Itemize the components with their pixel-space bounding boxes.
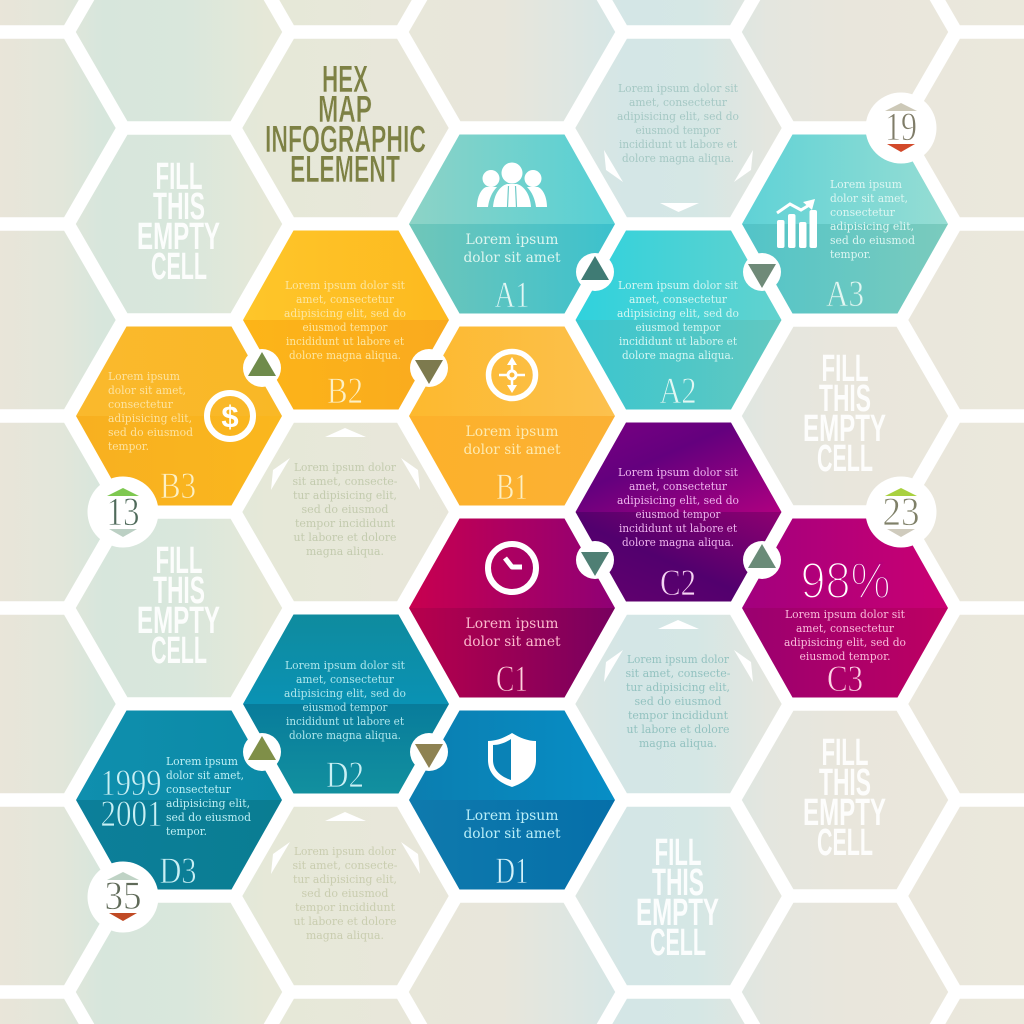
connector arrow: B3 to B2: [243, 349, 281, 387]
pale text cell: bottom left with arrows: [271, 812, 420, 942]
pale text cell: left center with arrows: tur adipisicing elit,: [293, 489, 397, 502]
badge: 13: [88, 476, 158, 548]
fill cell text: right lower: FILL: [822, 732, 868, 774]
fill cell text: right lower: THIS: [819, 762, 871, 804]
badge: 35: [88, 862, 158, 932]
panel: C3: eiusmod tempor.: [800, 650, 890, 663]
panel: D3: adipisicing elit,: [166, 797, 250, 810]
panel: B2: amet, consectetur: [296, 293, 395, 306]
pale text cell: left center with arrows: sed do eiusmod: [302, 503, 388, 516]
pale text cell: center right with arrows: tempor incididunt: [628, 709, 729, 722]
panel: B3: [76, 326, 282, 507]
icon: dollar coin: [207, 393, 253, 439]
panel: D2: Lorem ipsum dolor sit: [285, 659, 406, 672]
panel: D3: consectetur: [166, 783, 232, 796]
badge: 13: 13: [106, 489, 140, 534]
fill cell text: left lower: CELL: [151, 630, 207, 672]
panel: B1: Lorem ipsum: [466, 424, 559, 440]
panel: B3: dolor sit amet,: [108, 384, 186, 397]
panel: C2: [576, 422, 782, 604]
panel: D1: dolor sit amet: [464, 826, 561, 842]
icon: compass: [488, 352, 536, 398]
fill cell text: right lower: [803, 732, 886, 864]
badge: 19: 19: [885, 104, 917, 149]
pale text cell: bottom left with arrows: ut labore et dolore: [294, 915, 396, 928]
connector arrow: A2 to A3: [743, 253, 781, 291]
fill cell text: left lower: THIS: [153, 570, 205, 612]
panel: A2: A2: [660, 371, 696, 412]
title: INFOGRAPHIC: [265, 119, 426, 161]
panel: C3: C3: [827, 659, 863, 700]
panel: B2: incididunt ut labore et: [286, 335, 405, 348]
title: [265, 59, 426, 191]
fill cell text: bottom center: [636, 832, 719, 964]
pale text cell: center right with arrows: tur adipisicing elit,: [626, 681, 730, 694]
icon: people: [477, 162, 547, 207]
panel: B2: adipisicing elit, sed do: [284, 307, 406, 320]
panel: D1: Lorem ipsum: [466, 808, 559, 824]
panel: B1: dolor sit amet: [464, 442, 561, 458]
panel: B3: Lorem ipsum: [108, 370, 181, 383]
pale text cell: top right with arrows: dolore magna aliqua.: [622, 152, 734, 165]
panel: A1: dolor sit amet: [464, 250, 561, 266]
fill cell text: left lower: [137, 540, 220, 672]
panel: D2: adipisicing elit, sed do: [284, 687, 406, 700]
fill cell text: bottom center: CELL: [650, 922, 706, 964]
panel: B1: B1: [496, 467, 528, 508]
panel: D2: incididunt ut labore et: [286, 715, 405, 728]
panel: A1: Lorem ipsum: [466, 232, 559, 248]
panel: D3: [76, 710, 282, 892]
connector arrow: A1 to A2: [576, 253, 614, 291]
fill cell text: right upper: [803, 348, 886, 480]
title: HEX: [322, 59, 368, 101]
panel: C1: dolor sit amet: [464, 634, 561, 650]
connector arrow: D3 to D2: [243, 733, 281, 771]
pale text cell: center right with arrows: magna aliqua.: [639, 737, 717, 750]
panel: D1: D1: [496, 851, 528, 892]
fill cell text: left lower: EMPTY: [137, 600, 220, 642]
panel: C2: amet, consectetur: [629, 480, 728, 493]
panel: B3: sed do eiusmod: [108, 426, 193, 439]
panel: D3: tempor.: [166, 825, 207, 838]
pale text cell: top right with arrows: [604, 82, 753, 212]
panel: C2: C2: [660, 563, 696, 604]
panel: A2: Lorem ipsum dolor sit: [618, 279, 739, 292]
fill cell text: right lower: CELL: [817, 822, 873, 864]
fill cell text: left upper: [137, 156, 220, 288]
pale text cell: center right with arrows: [604, 620, 753, 750]
panel: A2: eiusmod tempor: [636, 321, 721, 334]
panel: C1: [409, 518, 615, 700]
fill cell text: left upper: EMPTY: [137, 216, 220, 258]
pale text cell: bottom left with arrows: sit amet, consecte-: [292, 859, 398, 872]
panel: A2: [576, 230, 782, 412]
panel: A2: dolore magna aliqua.: [622, 349, 734, 362]
panel: D3: sed do eiusmod: [166, 811, 251, 824]
pale text cell: bottom left with arrows: magna aliqua.: [306, 929, 384, 942]
pale text cell: bottom left with arrows: tempor incididunt: [295, 901, 396, 914]
panel: A3: [742, 134, 948, 315]
panel: B3: consectetur: [108, 398, 174, 411]
panel: D3: D3: [160, 851, 196, 892]
pale text cell: top right with arrows: adipisicing elit, sed do: [617, 110, 739, 123]
panel: D2: amet, consectetur: [296, 673, 395, 686]
fill cell text: left upper: FILL: [156, 156, 202, 198]
panel: C2: eiusmod tempor: [636, 508, 721, 521]
pale text cell: top right with arrows: eiusmod tempor: [636, 124, 721, 137]
icon: shield: [488, 733, 536, 787]
pale text cell: left center with arrows: [271, 428, 420, 558]
connector arrow: B2 to B1: [410, 349, 448, 387]
fill cell text: bottom center: EMPTY: [636, 892, 719, 934]
panel: A3: consectetur: [830, 206, 896, 219]
panel: C3: amet, consectetur: [796, 622, 895, 635]
title: ELEMENT: [290, 149, 400, 191]
panel: A3: sed do eiusmod: [830, 234, 915, 247]
pale text cell: bottom left with arrows: Lorem ipsum dolor: [294, 845, 397, 858]
panel: C2: adipisicing elit, sed do: [617, 494, 739, 507]
panel: D3: dolor sit amet,: [166, 769, 244, 782]
pale text cell: left center with arrows: tempor incididunt: [295, 517, 396, 530]
pale text cell: left center with arrows: sit amet, consecte-: [292, 475, 398, 488]
panel: C1: C1: [496, 659, 528, 700]
fill cell text: right upper: THIS: [819, 378, 871, 420]
connector arrow: C2 to C3: [743, 541, 781, 579]
panel: A2: amet, consectetur: [629, 293, 728, 306]
connector arrow: C1 to C2: [576, 541, 614, 579]
fill cell text: left lower: FILL: [156, 540, 202, 582]
title: MAP: [318, 89, 372, 131]
panel: C3: Lorem ipsum dolor sit: [785, 608, 906, 621]
panel: A3: A3: [826, 274, 864, 315]
badge: 19: [866, 92, 936, 164]
panel: C3: adipisicing elit, sed do: [784, 636, 906, 649]
pale text cell: left center with arrows: ut labore et dolore: [294, 531, 396, 544]
panel: C3: [742, 518, 948, 700]
panel: A3: Lorem ipsum: [830, 178, 903, 191]
panel: C2: Lorem ipsum dolor sit: [618, 466, 739, 479]
fill cell text: left upper: CELL: [151, 246, 207, 288]
pale text cell: bottom left with arrows: sed do eiusmod: [302, 887, 388, 900]
pale text cell: top right with arrows: incididunt ut labore et: [619, 138, 738, 151]
panel: A3: dolor sit amet,: [830, 192, 908, 205]
panel: D2: D2: [326, 755, 364, 796]
panel: A1: A1: [494, 275, 530, 316]
panel: B3: tempor.: [108, 440, 149, 453]
badge: 35: 35: [104, 873, 142, 918]
fill cell text: right upper: CELL: [817, 438, 873, 480]
pale text cell: center right with arrows: Lorem ipsum dolor: [627, 653, 730, 666]
panel: B3: B3: [160, 466, 196, 507]
fill cell text: bottom center: FILL: [654, 832, 702, 874]
panel: B2: dolore magna aliqua.: [289, 349, 401, 362]
panel: D3: 1999: [100, 763, 162, 804]
panel: A3: adipisicing elit,: [830, 220, 914, 233]
icon: dollar coin: $: [221, 399, 239, 434]
fill cell text: left upper: THIS: [153, 186, 205, 228]
pale text cell: bottom left with arrows: tur adipisicing elit,: [293, 873, 397, 886]
badge: 23: [866, 476, 936, 548]
pale text cell: top right with arrows: Lorem ipsum dolor sit: [618, 82, 739, 95]
panel: A2: adipisicing elit, sed do: [617, 307, 739, 320]
fill cell text: right upper: FILL: [822, 348, 868, 390]
pale text cell: left center with arrows: Lorem ipsum dolor: [294, 461, 397, 474]
panel: B2: [243, 230, 449, 412]
panel: B2: Lorem ipsum dolor sit: [285, 279, 406, 292]
panel: D3: 2001: [100, 794, 162, 835]
panel: B3: adipisicing elit,: [108, 412, 192, 425]
pale text cell: center right with arrows: ut labore et dolore: [626, 723, 730, 736]
pale text cell: center right with arrows: sit amet, consecte-: [626, 667, 731, 680]
pale text cell: top right with arrows: amet, consectetur: [629, 96, 728, 109]
badge: 23: 23: [882, 489, 920, 534]
connector arrow: D2 to D1: [410, 733, 448, 771]
panel: B1: [409, 326, 615, 508]
panel: C2: dolore magna aliqua.: [622, 536, 734, 549]
fill cell text: right upper: EMPTY: [803, 408, 886, 450]
panel: D3: Lorem ipsum: [166, 755, 239, 768]
panel: C2: incididunt ut labore et: [619, 522, 738, 535]
panel: C3: 98%: [800, 552, 890, 609]
panel: B2: B2: [327, 371, 363, 412]
panel: D1: [409, 710, 615, 892]
fill cell text: right lower: EMPTY: [803, 792, 886, 834]
panel: A3: tempor.: [830, 248, 871, 261]
fill cell text: bottom center: THIS: [652, 862, 704, 904]
panel: A2: incididunt ut labore et: [619, 335, 738, 348]
panel: C1: Lorem ipsum: [466, 616, 559, 632]
icon: clock: [488, 544, 536, 592]
panel: D2: eiusmod tempor: [302, 701, 388, 714]
panel: A1: [409, 134, 615, 316]
icon: bar chart with arrow: [777, 199, 817, 248]
panel: B2: eiusmod tempor: [302, 321, 388, 334]
panel: D2: dolore magna aliqua.: [289, 729, 401, 742]
panel: D2: [243, 614, 449, 796]
pale text cell: center right with arrows: sed do eiusmod: [634, 695, 722, 708]
pale text cell: left center with arrows: magna aliqua.: [306, 545, 384, 558]
